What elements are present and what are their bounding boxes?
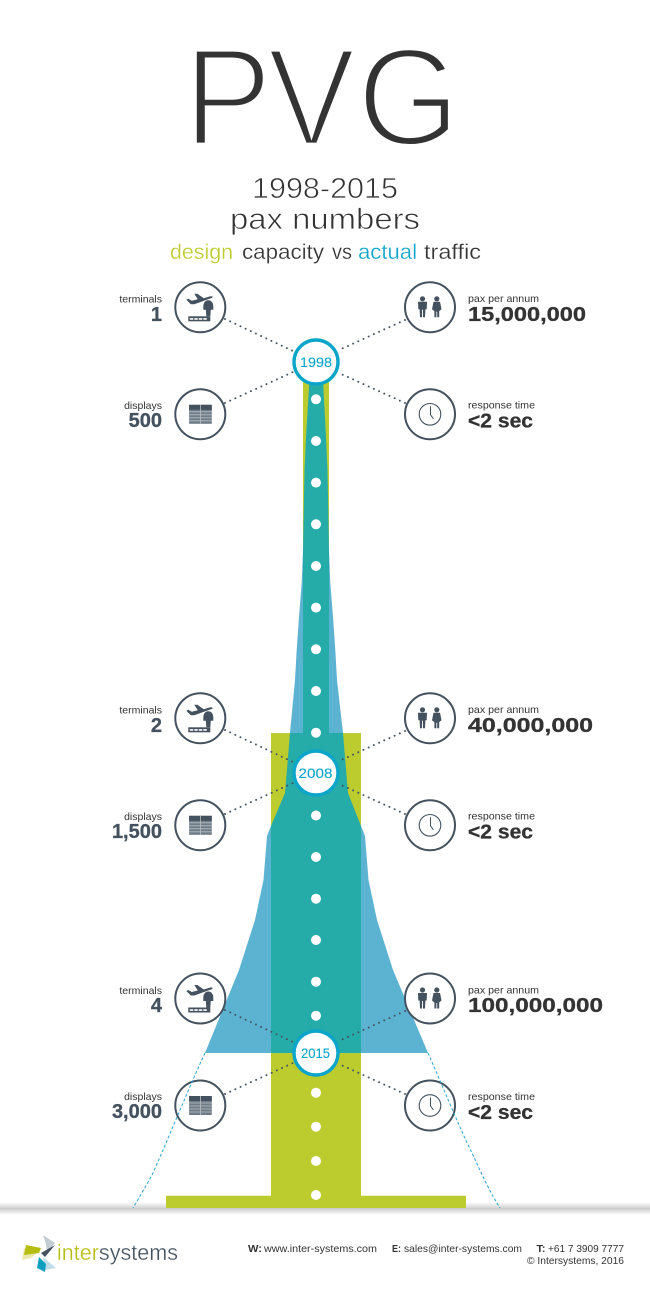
icon: displays bbox=[175, 389, 225, 439]
footer contact details: +61 7 3909 7777 bbox=[548, 1243, 624, 1255]
year marker 2008 bbox=[294, 751, 338, 795]
legend: design capacity vs actual traffic: design bbox=[170, 241, 233, 264]
legend: design capacity vs actual traffic: traffic bbox=[424, 241, 481, 264]
overlap of design and actual bbox=[271, 384, 361, 1053]
group: 2008 bbox=[112, 693, 593, 850]
footer contact details: E: bbox=[392, 1243, 401, 1255]
label: displays 500 bbox=[124, 400, 162, 432]
logo wordmark: intersystems bbox=[57, 1240, 178, 1265]
label: pax 15,000,000 bbox=[468, 293, 586, 326]
label: displays 1,500: 1,500 bbox=[112, 821, 162, 843]
icon: pax bbox=[405, 693, 455, 743]
logo mark bbox=[22, 1235, 56, 1272]
footer contact details: www.inter-systems.com bbox=[263, 1243, 377, 1255]
footer contact details: sales@inter-systems.com bbox=[404, 1243, 522, 1255]
label: pax 15,000,000: 15,000,000 bbox=[468, 304, 586, 326]
legend: design capacity vs actual traffic bbox=[170, 241, 481, 264]
label: displays 1,500 bbox=[112, 811, 162, 843]
year marker 2008: 2008 bbox=[298, 766, 332, 781]
icon: terminals bbox=[175, 282, 225, 332]
label: displays 3,000: 3,000 bbox=[112, 1101, 162, 1123]
subtitle: pax numbers: pax numbers bbox=[230, 203, 420, 236]
icon: displays bbox=[175, 800, 225, 850]
legend: design capacity vs actual traffic: vs bbox=[332, 241, 352, 264]
legend: design capacity vs actual traffic: actual bbox=[358, 241, 417, 264]
label: response time: <2 sec bbox=[468, 410, 533, 432]
label: response time: <2 sec bbox=[468, 822, 533, 844]
icon: terminals bbox=[175, 693, 225, 743]
title: PVG bbox=[184, 19, 460, 175]
label: displays 500: displays bbox=[124, 400, 162, 412]
icon: response time bbox=[405, 800, 455, 850]
label: terminals 2 bbox=[119, 705, 162, 737]
label: displays 3,000: displays bbox=[124, 1091, 162, 1103]
footer shadow band bbox=[0, 1202, 650, 1215]
label: response time: response time bbox=[468, 810, 535, 822]
year marker 2015: 2015 bbox=[301, 1046, 330, 1061]
footer contact details: T: bbox=[536, 1243, 546, 1255]
footer contact details: © Intersystems, 2016 bbox=[527, 1255, 624, 1267]
icon: displays bbox=[175, 1080, 225, 1130]
label: terminals 2: 2 bbox=[151, 715, 162, 737]
label: displays 3,000 bbox=[112, 1091, 162, 1123]
label: response time bbox=[468, 810, 535, 844]
label: pax 100,000,000 bbox=[468, 984, 603, 1017]
label: displays 1,500: displays bbox=[124, 811, 162, 823]
label: response time: <2 sec bbox=[468, 1102, 533, 1124]
label: terminals 1 bbox=[119, 294, 162, 326]
label: pax 15,000,000: pax per annum bbox=[468, 293, 539, 305]
label: pax 40,000,000: pax per annum bbox=[468, 704, 539, 716]
label: pax 100,000,000: pax per annum bbox=[468, 984, 539, 996]
label: response time: response time bbox=[468, 400, 535, 412]
label: response time bbox=[468, 400, 535, 432]
runway dots bbox=[311, 394, 321, 1200]
label: pax 100,000,000: 100,000,000 bbox=[468, 995, 603, 1017]
label: response time bbox=[468, 1091, 535, 1124]
icon: response time bbox=[405, 1080, 455, 1130]
label: terminals 4 bbox=[119, 985, 163, 1017]
label: terminals 1: 1 bbox=[151, 304, 162, 326]
icon: pax bbox=[405, 282, 455, 332]
dashed projection lines bbox=[133, 1053, 500, 1208]
actual traffic shape bbox=[205, 380, 428, 1053]
footer contact details: W: bbox=[248, 1243, 262, 1255]
group: 1998 bbox=[119, 282, 586, 439]
logo: intersystems bbox=[22, 1235, 178, 1272]
icon: pax bbox=[405, 974, 455, 1024]
chart: tower of design capacity vs actual traffic bbox=[166, 380, 466, 1208]
label: response time: response time bbox=[468, 1091, 535, 1103]
label: terminals 2: terminals bbox=[119, 705, 162, 717]
legend: design capacity vs actual traffic: capacity bbox=[242, 241, 325, 264]
year marker 1998 bbox=[294, 340, 338, 384]
footer contact details bbox=[248, 1243, 624, 1267]
year marker 2015 bbox=[294, 1031, 338, 1075]
design capacity shape bbox=[166, 380, 466, 1208]
group: 2015 bbox=[112, 974, 603, 1130]
icon: terminals bbox=[175, 974, 225, 1024]
label: terminals 4: terminals bbox=[119, 985, 162, 997]
label: pax 40,000,000: 40,000,000 bbox=[468, 715, 593, 737]
label: terminals 1: terminals bbox=[119, 294, 162, 306]
year marker 1998: 1998 bbox=[300, 355, 332, 370]
subtitle: years: 1998-2015 bbox=[252, 173, 398, 205]
label: terminals 4: 4 bbox=[151, 995, 163, 1017]
icon: response time bbox=[405, 389, 455, 439]
label: pax 40,000,000 bbox=[468, 704, 593, 737]
label: displays 500: 500 bbox=[129, 410, 162, 432]
